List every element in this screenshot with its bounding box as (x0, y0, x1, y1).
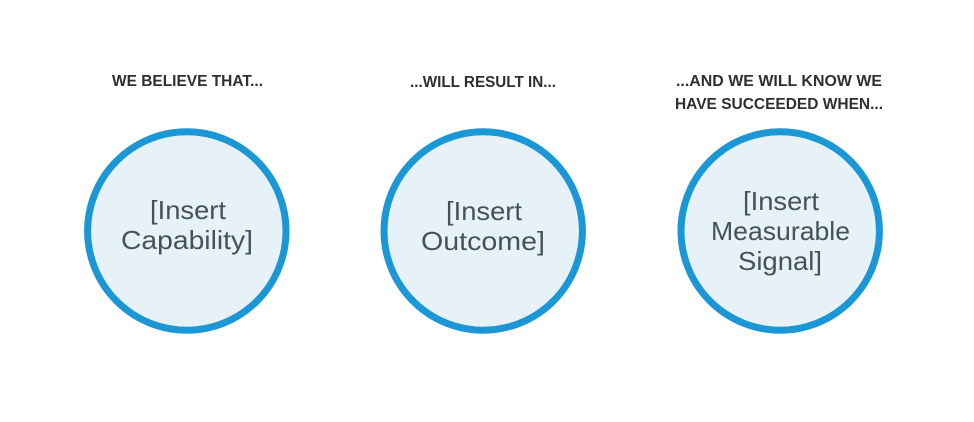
heading: we believe that: WE BELIEVE THAT... (112, 73, 263, 90)
circle: capability (88, 132, 286, 330)
circle text: capability: Capability] (121, 225, 253, 255)
heading: and we will know: ...AND WE WILL KNOW WE (676, 73, 882, 90)
circle: outcome (384, 132, 582, 330)
heading: and we will know (675, 73, 883, 113)
circle: measurable signal (681, 132, 879, 330)
circle text: measurable signal: Measurable (711, 216, 850, 246)
circle text: outcome (421, 196, 545, 256)
circle text: outcome: [Insert (446, 196, 523, 226)
column: outcome (384, 74, 582, 330)
heading: will result in: ...WILL RESULT IN... (410, 74, 556, 91)
circle text: outcome: Outcome] (421, 226, 545, 256)
circle text: measurable signal: [Insert (743, 186, 820, 216)
heading: and we will know: HAVE SUCCEEDED WHEN... (675, 96, 883, 113)
circle text: capability: [Insert (150, 195, 227, 225)
circle text: measurable signal: Signal] (738, 246, 822, 276)
column: capability (88, 73, 286, 330)
circle text: measurable signal (711, 186, 850, 276)
column: measurable signal (675, 73, 883, 330)
circle text: capability (121, 195, 253, 255)
